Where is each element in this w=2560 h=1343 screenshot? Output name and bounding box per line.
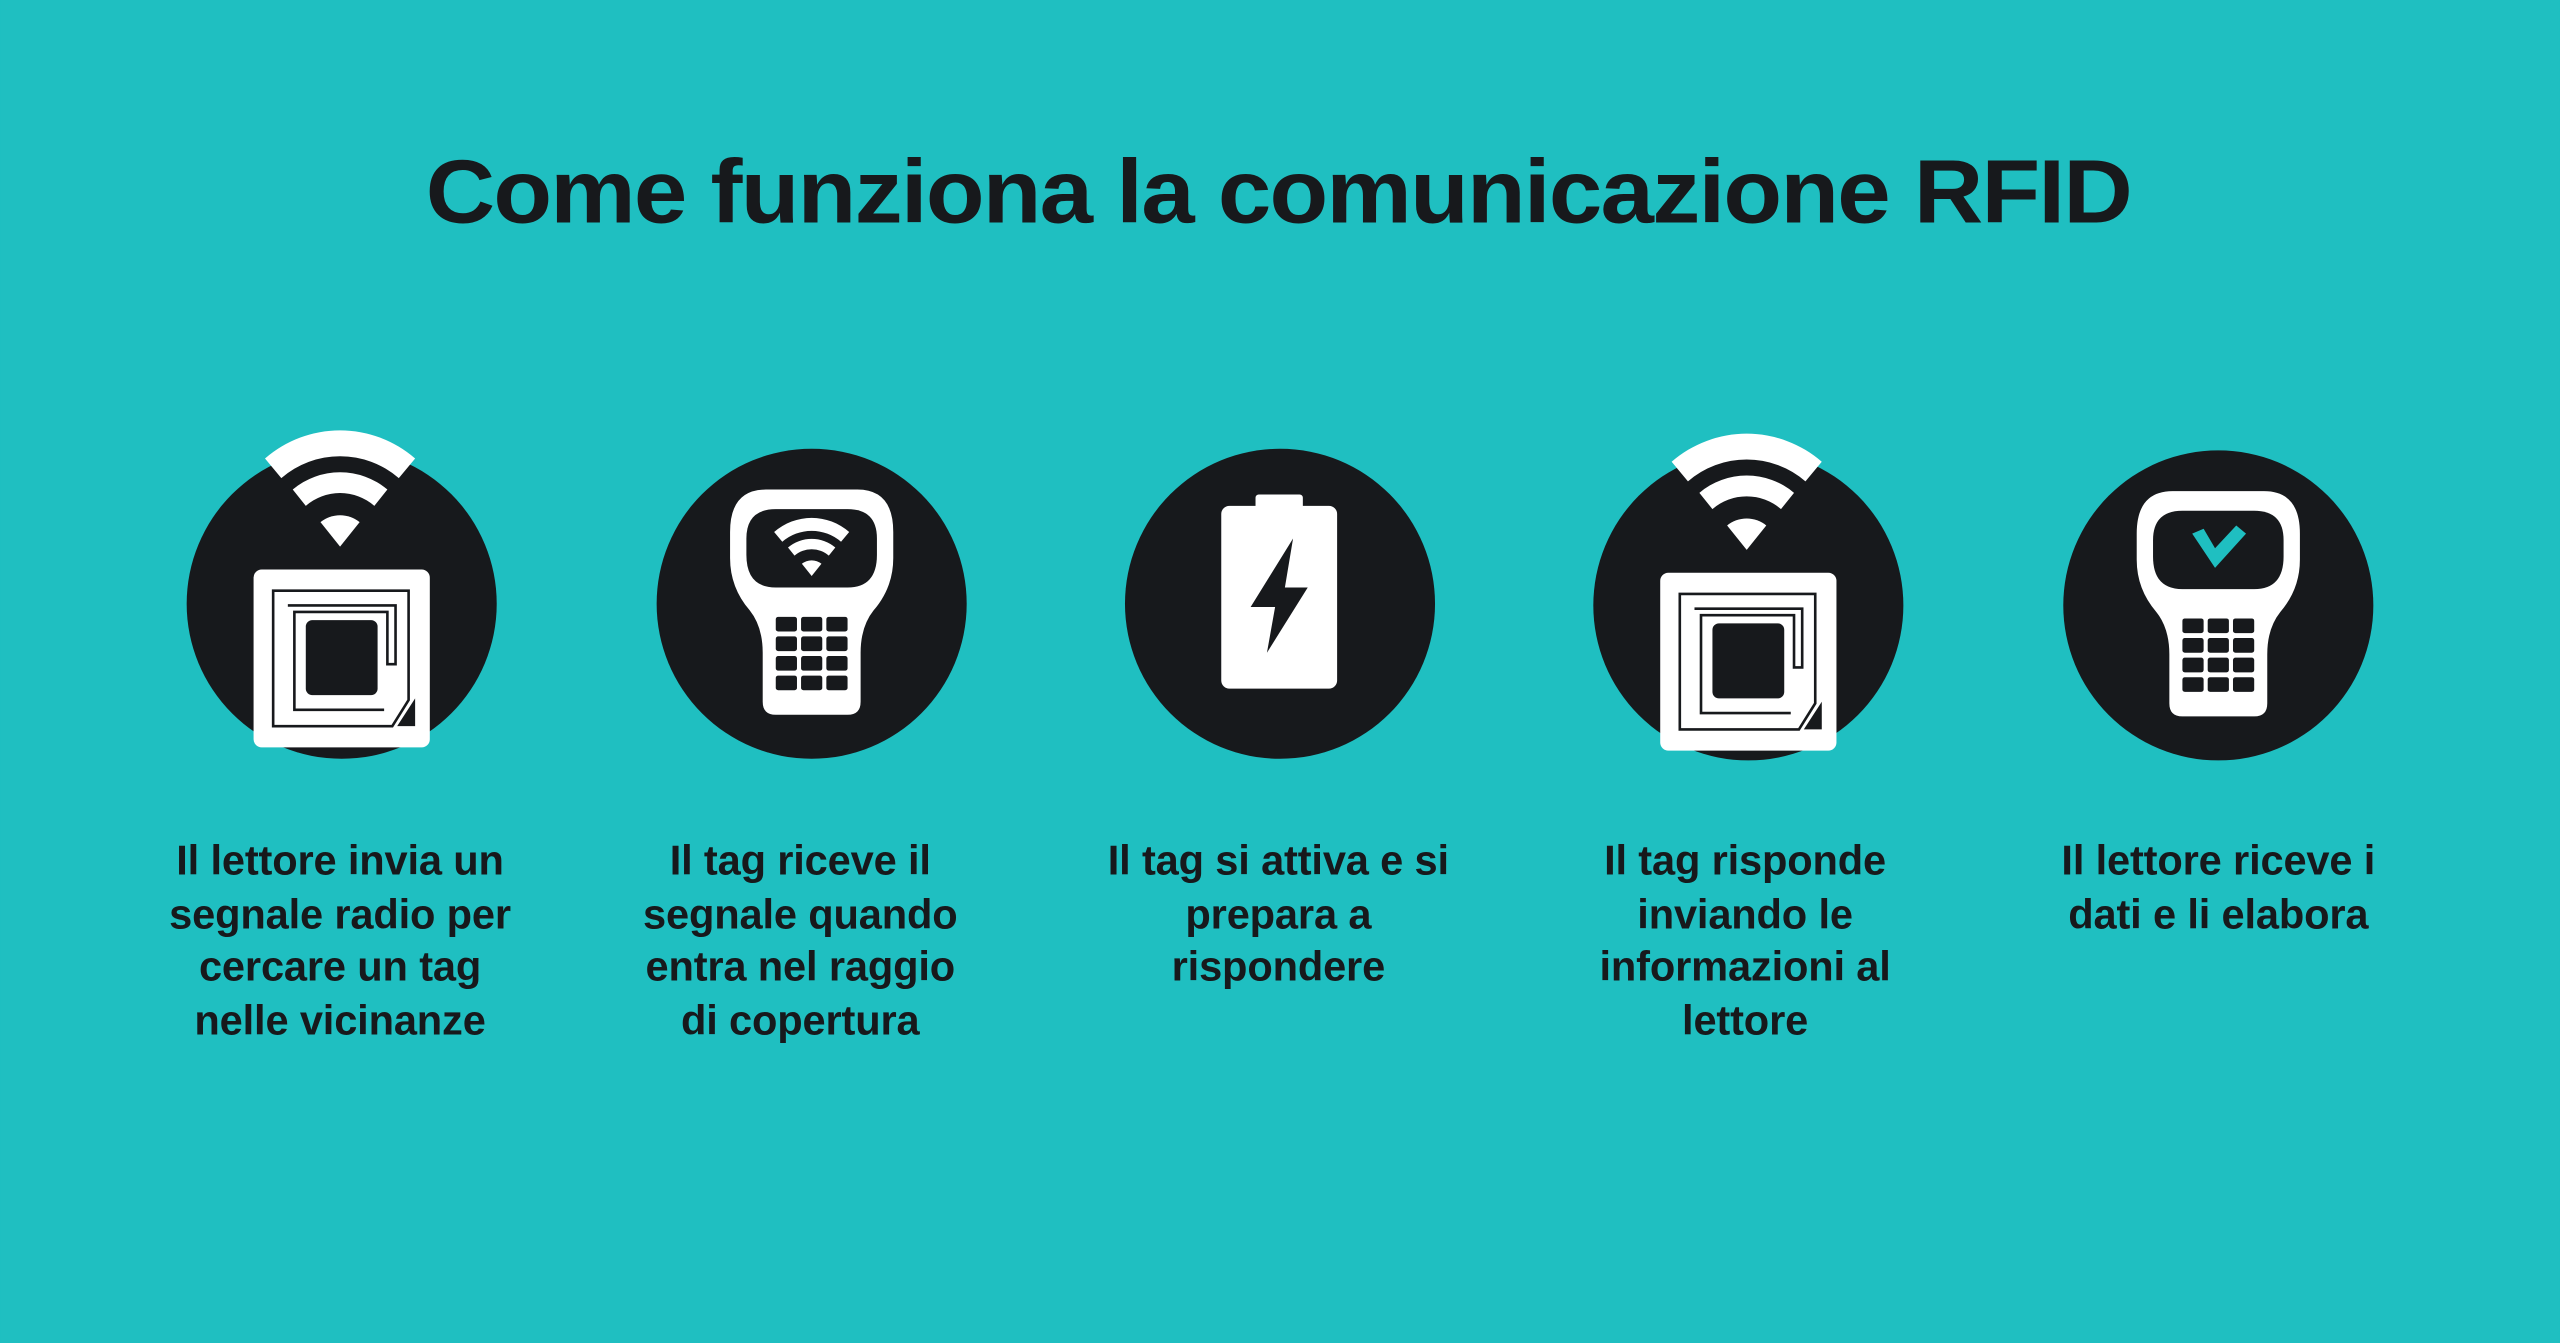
text: step 4: informazioni al <box>1599 943 1891 990</box>
icon: tag responding <box>1593 434 1903 760</box>
text: step 1: Il lettore invia un <box>176 837 504 884</box>
text: step 5: dati e li elabora <box>2068 891 2369 938</box>
icon: battery <box>1125 449 1435 759</box>
text: step 3: prepara a <box>1185 891 1372 938</box>
text: step 3: rispondere <box>1172 943 1385 990</box>
icon: reader receiving signal <box>657 449 967 759</box>
title: Come funziona la comunicazione RFID <box>426 143 2131 243</box>
icon: reader with check <box>2063 450 2373 760</box>
text: step 3: Il tag si attiva e si <box>1108 837 1449 884</box>
text: step 2: di copertura <box>681 997 921 1044</box>
text: step 2: Il tag riceve il <box>670 837 931 884</box>
text: step 4: lettore <box>1682 997 1808 1044</box>
text: step 4: inviando le <box>1637 891 1853 938</box>
text: step 4: Il tag risponde <box>1604 837 1886 884</box>
text: step 2: entra nel raggio <box>645 943 955 990</box>
text: step 2: segnale quando <box>643 891 957 938</box>
text: step 1: cercare un tag <box>199 943 481 990</box>
text: step 5: Il lettore riceve i <box>2061 837 2375 884</box>
icon: tag sending signal <box>187 430 497 759</box>
text: step 1: nelle vicinanze <box>194 997 486 1044</box>
text: step 1: segnale radio per <box>169 891 511 938</box>
